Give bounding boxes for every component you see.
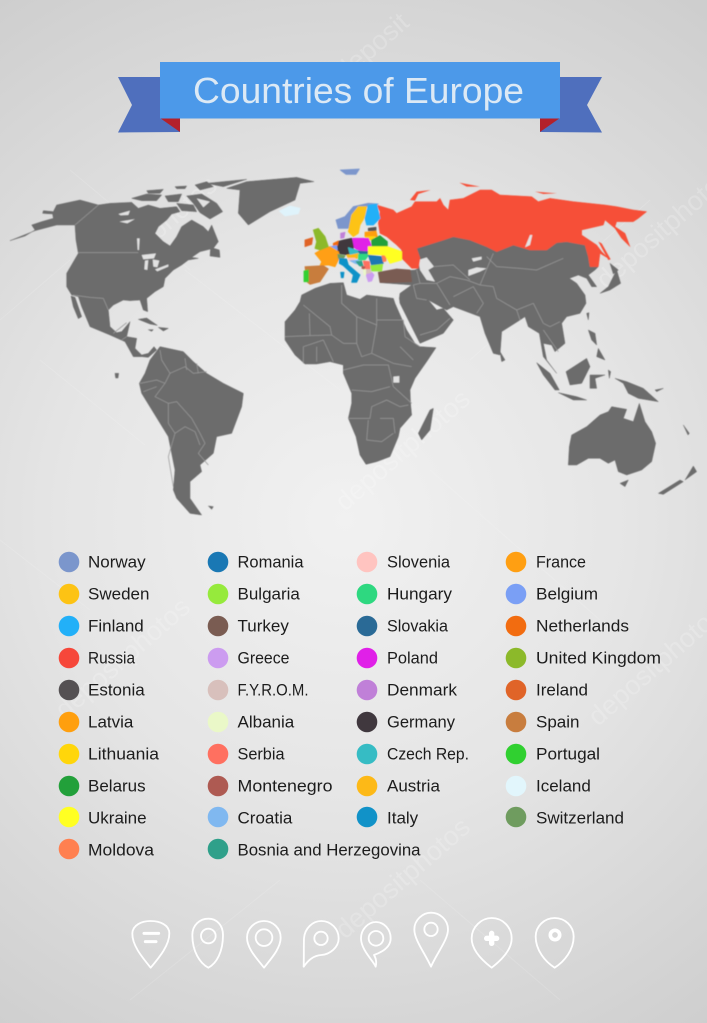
watermark: deposit — [329, 6, 415, 87]
map pin icons — [132, 913, 574, 968]
sri lanka — [500, 352, 505, 362]
americas and greenland — [10, 177, 314, 515]
column 3: Poland — [387, 648, 438, 668]
column 2: Greece — [238, 648, 290, 668]
column 1: Moldova — [88, 840, 155, 860]
spain — [305, 266, 328, 284]
watermark: depositphotos — [329, 812, 476, 945]
arctic russian islands — [459, 183, 480, 187]
column 2: Croatia — [238, 808, 293, 828]
hokkaido — [610, 263, 618, 274]
column 3: Hungary — [387, 584, 452, 604]
lake baikal — [525, 235, 532, 247]
column 1: Belarus — [88, 776, 146, 796]
united kingdom — [313, 228, 328, 250]
sumatra — [537, 363, 559, 390]
column 4: United Kingdom — [536, 648, 661, 668]
column 1: Finland — [88, 616, 144, 636]
belgium — [330, 246, 337, 250]
poland — [353, 238, 372, 252]
column 3: Czech Rep. — [387, 744, 469, 764]
taiwan — [587, 313, 589, 320]
latvia — [365, 231, 377, 237]
sakhalin — [598, 242, 611, 260]
column 4: Spain — [536, 712, 579, 732]
caribbean islands — [158, 327, 168, 331]
watermark: depositphotos — [49, 592, 196, 725]
slovenia — [348, 258, 355, 261]
bosnia and herzegovina — [356, 261, 363, 267]
ribbon left fold — [160, 118, 180, 132]
madagascar — [418, 408, 433, 440]
sardinia — [341, 272, 344, 278]
africa, asia, oceania — [285, 237, 697, 494]
sweden — [348, 207, 367, 237]
column 4: Iceland — [536, 776, 591, 796]
icon: speech pin — [304, 921, 339, 967]
north america — [10, 200, 218, 357]
ribbon left tail — [118, 77, 180, 132]
column 2: Montenegro — [238, 776, 332, 796]
africa and asia borders — [285, 253, 563, 442]
new guinea — [615, 378, 658, 402]
title: Countries of Europe — [193, 70, 524, 111]
france — [315, 247, 340, 267]
column 1: Russia — [88, 648, 135, 668]
newfoundland — [210, 247, 220, 257]
australia — [568, 403, 656, 475]
icon: dot pin — [536, 918, 574, 968]
svalbard — [340, 169, 359, 174]
column 4: Portugal — [536, 744, 600, 764]
macedonia — [366, 270, 371, 274]
column 4: Ireland — [536, 680, 588, 700]
column 1: Sweden — [88, 584, 149, 604]
watermark: depositphotos — [76, 170, 223, 303]
column 3: Slovenia — [387, 552, 451, 572]
column 4: Netherlands — [536, 616, 629, 636]
column 2 — [208, 552, 421, 860]
column 1: Ukraine — [88, 808, 147, 828]
estonia — [368, 227, 376, 231]
column 1: Lithuania — [88, 744, 160, 764]
croatia — [350, 260, 363, 266]
column 3: Slovakia — [387, 616, 449, 636]
americas borders — [73, 205, 208, 487]
czech republic — [348, 248, 360, 254]
column 3: Italy — [387, 808, 419, 828]
column 2: Serbia — [238, 744, 285, 764]
new zealand — [685, 466, 697, 480]
netherlands — [333, 241, 338, 247]
albania — [363, 269, 366, 275]
column 4: France — [536, 552, 586, 572]
belarus — [372, 236, 387, 247]
column 2: Bosnia and Herzegovina — [238, 840, 421, 860]
title ribbon — [118, 62, 602, 132]
small pacific islands — [655, 388, 663, 392]
icon: curled pin — [361, 922, 391, 967]
iceland — [279, 206, 300, 216]
switzerland — [338, 254, 345, 259]
cuba — [138, 318, 157, 325]
column 2: Albania — [238, 712, 295, 732]
borneo — [566, 358, 590, 385]
column 4: Belgium — [536, 584, 598, 604]
novaya zemlya — [410, 190, 431, 201]
column 3: Austria — [387, 776, 440, 796]
column 2: Turkey — [238, 616, 289, 636]
south america — [139, 347, 243, 515]
column 4 — [506, 552, 661, 828]
lithuania — [365, 237, 375, 240]
ribbon main band — [160, 62, 560, 118]
icon: egg pin — [192, 919, 223, 968]
watermark: depositphotos — [329, 384, 476, 517]
ireland — [305, 238, 313, 247]
montenegro — [362, 266, 365, 269]
icon: pin with lines — [132, 921, 169, 968]
greenland — [227, 177, 314, 225]
column 1: Norway — [88, 552, 146, 572]
inland seas — [393, 257, 487, 383]
italy — [339, 258, 360, 282]
great lakes and arctic water — [118, 198, 210, 271]
world map — [10, 169, 697, 515]
bulgaria — [371, 264, 383, 271]
finland — [365, 204, 380, 225]
sulawesi — [590, 375, 605, 388]
portugal — [304, 270, 308, 282]
tasmania — [620, 480, 628, 487]
eurasia — [380, 237, 598, 373]
japan — [600, 270, 621, 293]
icon: plus pin — [472, 918, 512, 968]
romania — [368, 255, 383, 266]
ukraine — [368, 247, 402, 263]
column 2: F.Y.R.O.M. — [238, 680, 308, 700]
baja california — [71, 296, 82, 319]
europe countries — [279, 169, 412, 284]
column 2: Romania — [238, 552, 304, 572]
icon: tall pin — [414, 913, 448, 967]
java — [558, 393, 587, 400]
arctic islands — [132, 194, 162, 201]
norway — [336, 203, 378, 228]
slovakia — [358, 251, 368, 254]
column 3: Denmark — [387, 680, 458, 700]
column 1: Estonia — [88, 680, 145, 700]
column 3 — [357, 552, 469, 828]
greece — [366, 272, 374, 282]
column 2: Bulgaria — [238, 584, 300, 604]
moldova — [382, 254, 386, 262]
africa — [285, 283, 436, 464]
column 3: Germany — [387, 712, 455, 732]
russia — [377, 183, 647, 268]
legend — [59, 552, 661, 860]
column 1 — [59, 552, 160, 860]
ribbon right fold — [540, 118, 560, 132]
column 1: Latvia — [88, 712, 134, 732]
philippines — [588, 330, 597, 345]
serbia — [363, 261, 370, 269]
denmark — [341, 232, 345, 238]
hungary — [358, 254, 369, 260]
ribbon right tail — [540, 77, 602, 132]
column 4: Switzerland — [536, 808, 624, 828]
germany — [337, 238, 353, 255]
turkey — [378, 269, 412, 282]
austria — [347, 253, 358, 258]
icon: round pin — [247, 921, 281, 968]
